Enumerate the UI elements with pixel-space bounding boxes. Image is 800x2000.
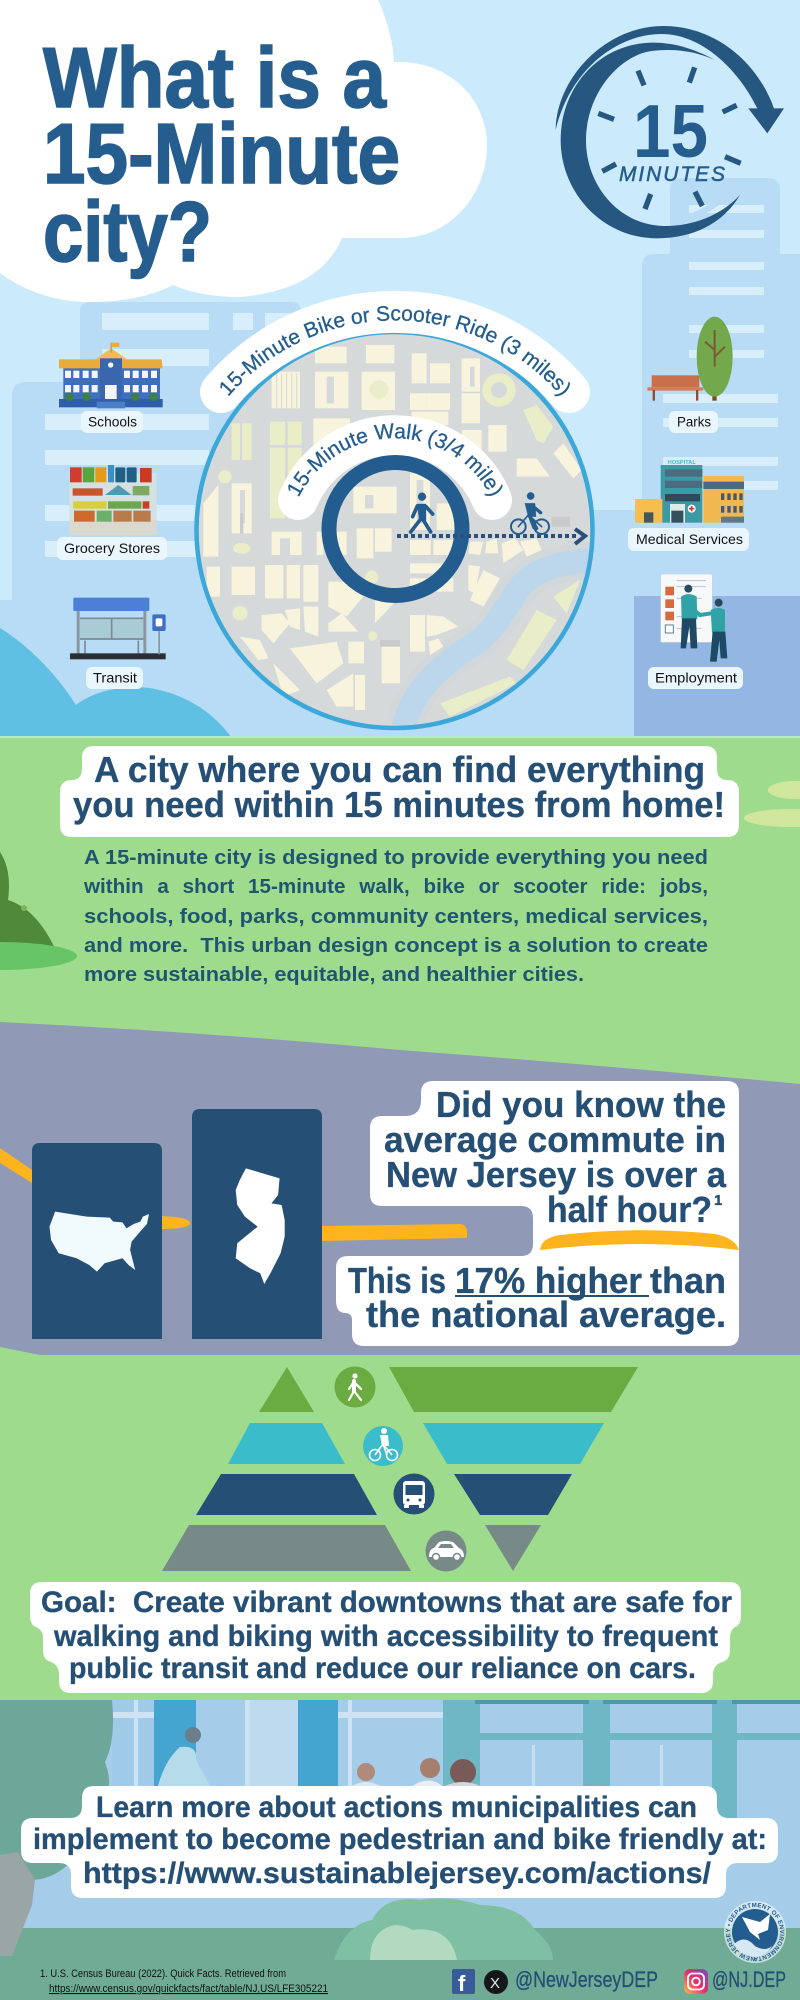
icon: bench and tree	[647, 317, 733, 401]
icon: bus shelter	[70, 598, 166, 659]
paragraph: more sustainable, equitable, and healthier cities.	[84, 963, 584, 986]
ground	[0, 1928, 800, 2000]
arc label: 15-minute walk: 15-Minute Walk (3/4 mile)	[288, 423, 503, 497]
cloud behind title	[0, 0, 487, 302]
icon: car	[426, 1530, 466, 1572]
citation: 1. U.S. Census Bureau (2022). Quick Facts. Retrieved from	[40, 1968, 286, 1980]
icon: New Jersey map	[236, 1168, 285, 1284]
arc label: 15-minute bike or scooter ride: 15-Minute Bike or Scooter Ride (3 miles)	[220, 306, 570, 396]
building facade	[112, 1700, 800, 1870]
icon: Facebook: f	[458, 1971, 466, 1996]
paragraph: within a short 15-minute walk, bike or scooter ride: jobs,	[83, 875, 708, 898]
commute bubble: New Jersey is over a	[386, 1154, 727, 1195]
paragraph: and more. This urban design concept is a solution to create	[84, 934, 708, 957]
icon: checklist and handshake	[661, 574, 727, 662]
social handles: @NewJerseyDEP	[515, 1967, 658, 1992]
commute bubble: than	[650, 1260, 726, 1301]
commute bubble: average commute in	[384, 1119, 726, 1160]
goal bubble: Goal: Create vibrant downtowns that are safe for	[41, 1586, 732, 1619]
icon: X: X	[490, 1975, 500, 1992]
title: What is a	[43, 31, 387, 126]
street map circle	[190, 330, 600, 730]
icon: X	[484, 1970, 508, 1994]
icon: cyclist	[363, 1426, 403, 1466]
dotted arrow with walker and cyclist	[397, 492, 585, 544]
commute bubble: This is	[348, 1260, 446, 1301]
icon: 15 minutes clock: 15	[633, 89, 708, 173]
icon: school building	[59, 343, 163, 408]
commute bubble: Did you know the	[436, 1084, 726, 1125]
label: Medical Services: Medical Services	[636, 531, 743, 547]
destination: transit	[70, 598, 166, 689]
destination: parks	[647, 317, 733, 433]
commute bubble: half hour?	[547, 1189, 712, 1230]
paragraph: A 15-minute city is designed to provide everything you need	[84, 846, 708, 869]
heading bubble	[60, 746, 739, 837]
icon: hospital: HOSPITAL	[668, 460, 696, 466]
label: Schools: Schools	[88, 414, 137, 430]
heading bubble: you need within 15 minutes from home!	[73, 784, 725, 825]
label: Grocery Stores: Grocery Stores	[64, 540, 160, 556]
label: Transit: Transit	[93, 670, 137, 686]
logo: NJDEP seal: NEW JERSEY • DEPARTMENT OF ENVIRONMENTAL PROTECTION	[726, 1902, 784, 1962]
destination: medical services	[628, 460, 749, 551]
paragraph	[83, 846, 708, 986]
icon: Instagram	[684, 1969, 708, 1994]
tree	[0, 1700, 113, 1956]
call to action bubble: https://www.sustainablejersey.com/actions/	[83, 1857, 712, 1890]
icon: 15 minutes clock	[556, 26, 784, 238]
label: Employment: Employment	[655, 670, 737, 686]
icon: pedestrian	[334, 1366, 376, 1408]
icon: Facebook	[452, 1969, 475, 1996]
destination: grocery stores	[57, 465, 167, 560]
title	[43, 31, 400, 280]
call to action bubble: Learn more about actions municipalities can	[96, 1791, 697, 1824]
goal bubble	[30, 1582, 741, 1693]
yellow route line	[0, 1148, 467, 1241]
bar: U.S.	[32, 1143, 162, 1339]
citation: https://www.census.gov/quickfacts/fact/table/NJ,US/LFE305221	[49, 1983, 328, 1995]
decorative bush	[0, 852, 77, 970]
icon: U.S. map	[49, 1212, 149, 1272]
icon: grocery shelf	[69, 465, 157, 535]
icon: bus	[394, 1474, 434, 1514]
chart: transport priority pyramids	[162, 1366, 638, 1572]
destination: employment	[648, 574, 743, 689]
commute bubble: 17% higher	[455, 1260, 642, 1301]
call to action bubble: implement to become pedestrian and bike friendly at:	[33, 1823, 767, 1856]
people on the street	[158, 1727, 480, 1786]
call to action bubble	[21, 1786, 778, 1898]
bush	[334, 1898, 553, 1960]
icon: 15 minutes clock: MINUTES	[619, 163, 725, 186]
panel: sky and city hero	[0, 0, 800, 739]
panel: definition (green)	[0, 738, 800, 1700]
paragraph: schools, food, parks, community centers, medical services,	[84, 905, 708, 928]
destination: schools	[59, 343, 163, 433]
social handles	[452, 1967, 786, 1996]
title: city?	[43, 185, 212, 280]
heading bubble: A city where you can find everything	[94, 749, 705, 790]
walking radius ring	[329, 462, 462, 596]
goal bubble: walking and biking with accessibility to frequent	[53, 1620, 718, 1653]
commute bubble	[336, 1081, 739, 1346]
goal bubble: public transit and reduce our reliance on cars.	[69, 1652, 696, 1685]
title: 15-Minute	[43, 107, 400, 202]
commute bubble: 1	[714, 1192, 722, 1209]
panel: commute road	[0, 1022, 800, 1355]
commute bubble: the national average.	[366, 1294, 726, 1335]
label: Parks: Parks	[677, 414, 711, 430]
citation	[40, 1968, 328, 1995]
bar: New Jersey	[192, 1109, 322, 1339]
